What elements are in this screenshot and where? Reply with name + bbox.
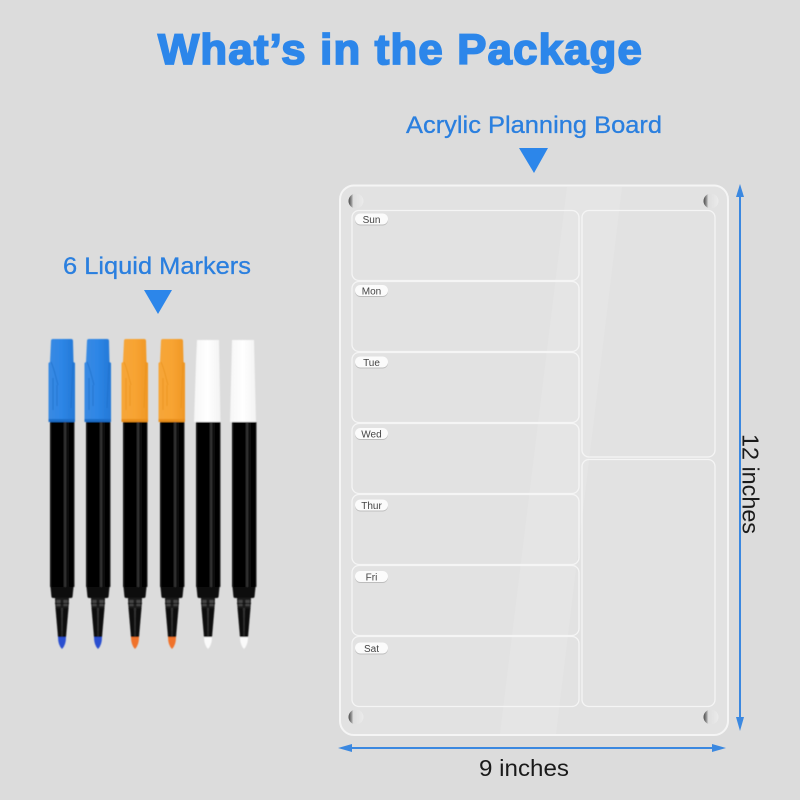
dimension arrow: height xyxy=(736,184,744,731)
light reflection xyxy=(500,187,622,734)
arrow: pointing to board xyxy=(519,148,548,173)
dimension label: 12 inches: 12 inches xyxy=(738,434,764,534)
marker: orange 1 xyxy=(122,339,148,649)
day labels: Wed xyxy=(361,430,382,440)
day labels: Fri xyxy=(366,572,377,584)
dimension arrow: width xyxy=(338,744,726,752)
marker: white 1 xyxy=(194,340,220,649)
side panels xyxy=(582,210,715,706)
marker: blue 2 xyxy=(84,339,111,649)
heading: Acrylic Planning Board: Acrylic Planning Board xyxy=(406,112,662,139)
marker: white 2 xyxy=(230,340,256,649)
arrow: pointing to markers xyxy=(144,290,172,314)
marker: orange 2 xyxy=(158,339,185,649)
day labels: Mon xyxy=(362,286,381,298)
day rows xyxy=(352,210,579,706)
title: What’s in the Package xyxy=(158,26,643,74)
mounting holes xyxy=(348,194,718,724)
markers xyxy=(48,339,256,649)
acrylic planning board xyxy=(340,186,728,735)
marker: blue 1 xyxy=(48,339,75,649)
day labels xyxy=(355,214,388,655)
dimension label: 9 inches: 9 inches xyxy=(479,755,569,781)
day labels: Sun xyxy=(363,215,380,226)
day labels: Tue xyxy=(363,358,380,369)
day labels: Thur xyxy=(361,501,382,512)
board plate xyxy=(340,186,728,735)
day labels: Sat xyxy=(364,644,379,655)
heading: 6 Liquid Markers: 6 Liquid Markers xyxy=(63,253,251,280)
